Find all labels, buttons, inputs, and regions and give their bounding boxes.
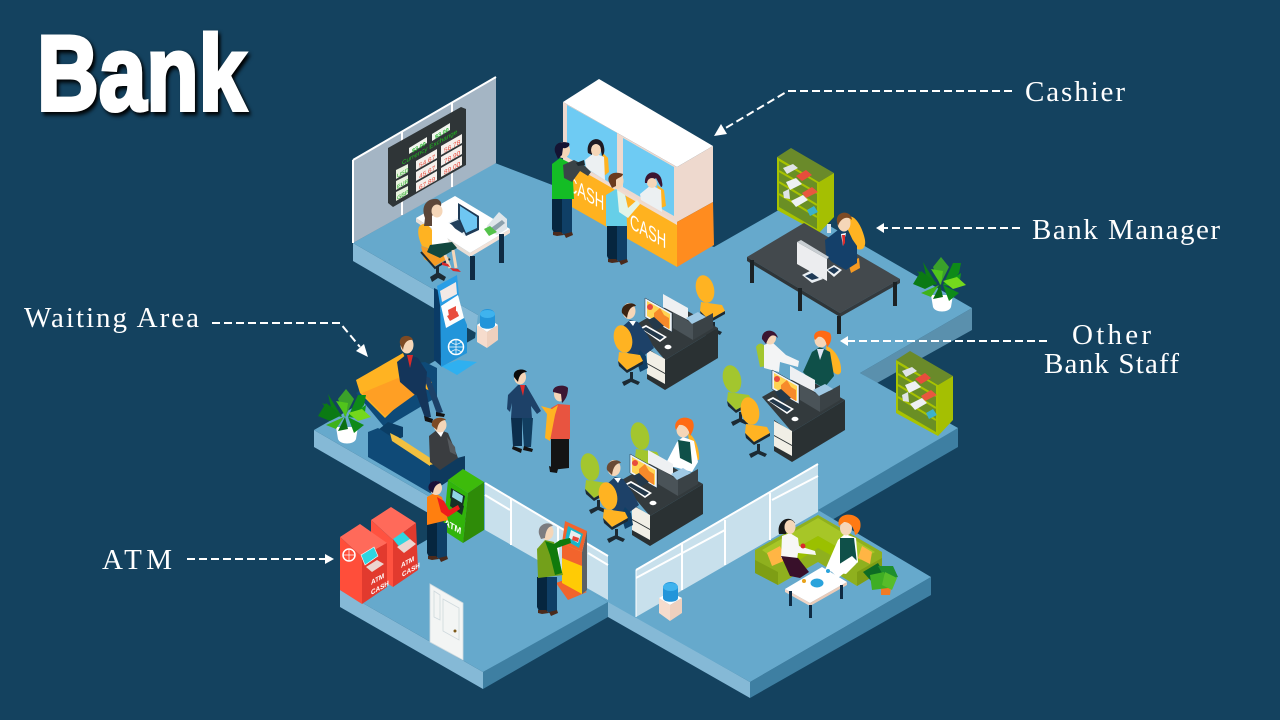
second water dispenser <box>659 582 682 621</box>
self-service kiosk and customer <box>537 521 587 616</box>
label: Cashier: Cashier <box>1025 76 1125 108</box>
cashier booth <box>563 79 714 267</box>
isometric floor plan <box>314 77 972 698</box>
green ATM: ATM <box>444 517 462 536</box>
title: Bank <box>37 13 246 133</box>
label: Bank Manager <box>876 214 1220 246</box>
label: Cashier <box>714 76 1125 136</box>
teller woman at back <box>585 139 609 180</box>
currency exchange board: EUR <box>397 179 409 191</box>
currency exchange board: $3.00 <box>435 127 449 141</box>
customer in red <box>541 386 570 473</box>
cashier booth: CASH <box>568 170 604 215</box>
customer at green ATM <box>427 481 460 562</box>
small plant <box>863 563 898 595</box>
teller woman at front <box>640 172 666 212</box>
label: ATM <box>102 544 334 576</box>
bank manager desk <box>747 148 900 334</box>
back glass wall <box>353 77 496 243</box>
currency exchange board: USD <box>397 168 409 180</box>
woman with dark hair <box>779 519 816 578</box>
label: Other Bank Staff <box>840 319 1179 380</box>
label: Waiting Area: Waiting Area <box>24 302 199 334</box>
label: Bank Manager: Bank Manager <box>1032 214 1220 246</box>
workstation 3 <box>578 418 703 546</box>
info kiosk <box>434 275 477 375</box>
waiting area: orange sofa <box>356 353 437 428</box>
customer in green <box>552 142 591 238</box>
currency exchange board <box>388 107 466 207</box>
ATM front: CASH <box>371 579 389 597</box>
currency exchange board: GBP <box>397 190 409 202</box>
label: ATM: ATM <box>102 544 172 576</box>
currency exchange board: $3.00 <box>412 141 426 155</box>
customer in light blue <box>606 173 640 265</box>
man on sofa <box>397 336 445 423</box>
label: Other Bank Staff: Bank Staff <box>1044 348 1179 380</box>
currency exchange board: 67.89 <box>419 176 435 192</box>
floor platform <box>314 163 972 698</box>
ATM front: ATM <box>371 572 384 587</box>
door <box>430 584 463 660</box>
cashier booth: CASH <box>630 208 666 253</box>
ATM front <box>340 524 389 604</box>
red ATMs: ATM <box>401 555 414 570</box>
currency exchange board: 54.67 <box>419 154 435 170</box>
lounge sofa, table and women <box>755 515 882 618</box>
red ATMs <box>340 507 420 604</box>
woman with orange hair <box>825 515 861 578</box>
currency exchange board: 56.78 <box>444 139 460 155</box>
workstation 2 <box>720 331 845 462</box>
customer in suit <box>507 369 541 453</box>
label: Other Bank Staff: Other <box>1072 319 1151 351</box>
glass wall middle <box>485 483 608 600</box>
currency exchange board: 89.00 <box>444 161 460 177</box>
plant right <box>913 257 966 312</box>
label: Waiting Area <box>24 302 368 357</box>
green ATM <box>443 469 484 543</box>
workstation 1 <box>611 273 725 390</box>
waiting area: navy sofa <box>368 418 465 493</box>
ATM rear <box>371 507 418 587</box>
cashier desk with woman <box>416 196 510 282</box>
coffee table <box>785 567 847 618</box>
currency exchange board: 45.67 <box>419 165 435 181</box>
plant left <box>318 389 371 444</box>
water dispenser <box>477 309 498 348</box>
currency exchange board: 78.90 <box>444 150 460 166</box>
currency exchange board: Currency Exchange <box>402 128 457 167</box>
glass wall right <box>636 464 818 617</box>
bookshelf right <box>896 351 953 436</box>
red ATMs: CASH <box>402 561 420 579</box>
